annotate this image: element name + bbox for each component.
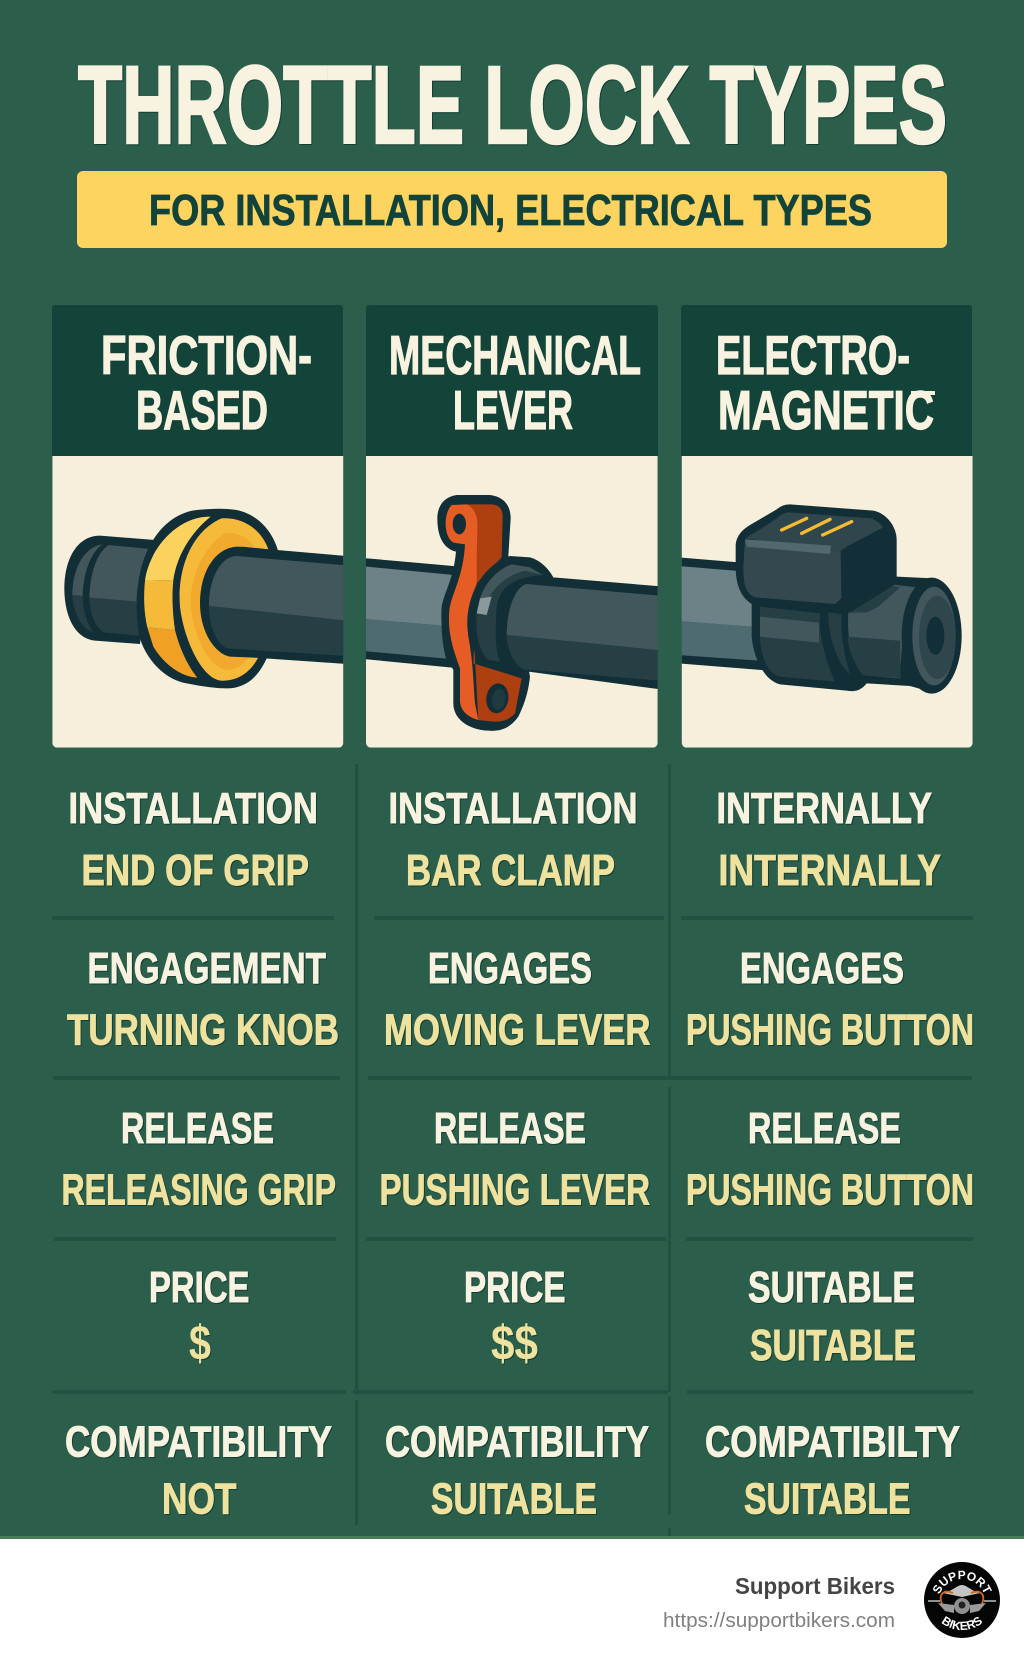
- row: engagement: ENGAGES: [740, 944, 904, 993]
- footer url: https://supportbikers.com: [663, 1610, 895, 1632]
- row: price: $: [189, 1317, 211, 1371]
- row: compatibility: SUITABLE: [744, 1474, 910, 1524]
- row: price: SUITABLE: [748, 1263, 915, 1312]
- icon: electromagnetic switch on handlebar: [678, 456, 973, 748]
- row: engagement: [67, 944, 974, 1054]
- row: installation: END OF GRIP: [82, 846, 309, 895]
- row: price: SUITABLE: [750, 1321, 916, 1370]
- electromagnetic header: MAGNETIC: [718, 380, 934, 441]
- footer: white strip: [0, 1539, 1024, 1666]
- electromagnetic header: ELECTRO-: [716, 325, 910, 386]
- row: release: RELEASING GRIP: [62, 1166, 336, 1214]
- row: engagement: ENGAGEMENT: [88, 944, 326, 993]
- logo: support bikers badge: [924, 1562, 1000, 1638]
- row: compatibility: COMPATIBILITY: [385, 1418, 649, 1466]
- electromagnetic header: [681, 305, 972, 456]
- mechanical lever header: LEVER: [453, 380, 573, 441]
- row: release: PUSHING LEVER: [380, 1166, 650, 1214]
- friction-based header: [52, 305, 343, 456]
- row: release: [62, 1104, 974, 1214]
- row: installation: INTERNALLY: [718, 846, 941, 895]
- row: release: RELEASE: [121, 1104, 274, 1153]
- subtitle banner: [77, 171, 947, 248]
- row: price: PRICE: [149, 1263, 250, 1312]
- row: compatibility: SUITABLE: [431, 1474, 597, 1524]
- friction-based header: BASED: [136, 380, 268, 441]
- subtitle banner: FOR INSTALLATION, ELECTRICAL TYPES: [149, 186, 872, 235]
- panel: friction-based: [52, 305, 347, 748]
- row: installation: INSTALLATION: [68, 784, 318, 833]
- row: installation: BAR CLAMP: [406, 846, 615, 895]
- row: installation: INSTALLATION: [388, 784, 638, 833]
- row: installation: INTERNALLY: [716, 784, 932, 833]
- table: comparison rows: [62, 784, 974, 1524]
- row: price: PRICE: [464, 1263, 566, 1312]
- mechanical lever header: [366, 305, 658, 456]
- icon: lever clamp on handlebar: [363, 456, 660, 748]
- footer brand name: Support Bikers: [735, 1573, 895, 1599]
- row: compatibility: [65, 1418, 960, 1524]
- row: compatibility: COMPATIBILTY: [705, 1418, 960, 1466]
- row: release: RELEASE: [434, 1104, 586, 1153]
- logo: support bikers badge: BIKERS: [942, 1616, 982, 1630]
- row: compatibility: COMPATIBILITY: [65, 1418, 332, 1466]
- row: engagement: ENGAGES: [428, 944, 592, 993]
- logo: support bikers badge: SUPPORT: [933, 1570, 992, 1594]
- panel: electromagnetic: [678, 305, 973, 748]
- row: price: $$: [491, 1317, 538, 1371]
- icon: friction ring on handlebar: [52, 456, 347, 748]
- row: price: [149, 1263, 916, 1371]
- mechanical lever header: MECHANICAL: [389, 325, 641, 386]
- row: engagement: TURNING KNOB: [67, 1006, 339, 1054]
- friction-based header: FRICTION-: [101, 325, 312, 386]
- row: compatibility: NOT: [162, 1474, 237, 1524]
- row: release: RELEASE: [748, 1104, 901, 1153]
- row: installation: [68, 784, 941, 895]
- row: engagement: MOVING LEVER: [384, 1006, 650, 1054]
- grid lines: [52, 764, 973, 1536]
- panel: mechanical lever: [363, 305, 660, 748]
